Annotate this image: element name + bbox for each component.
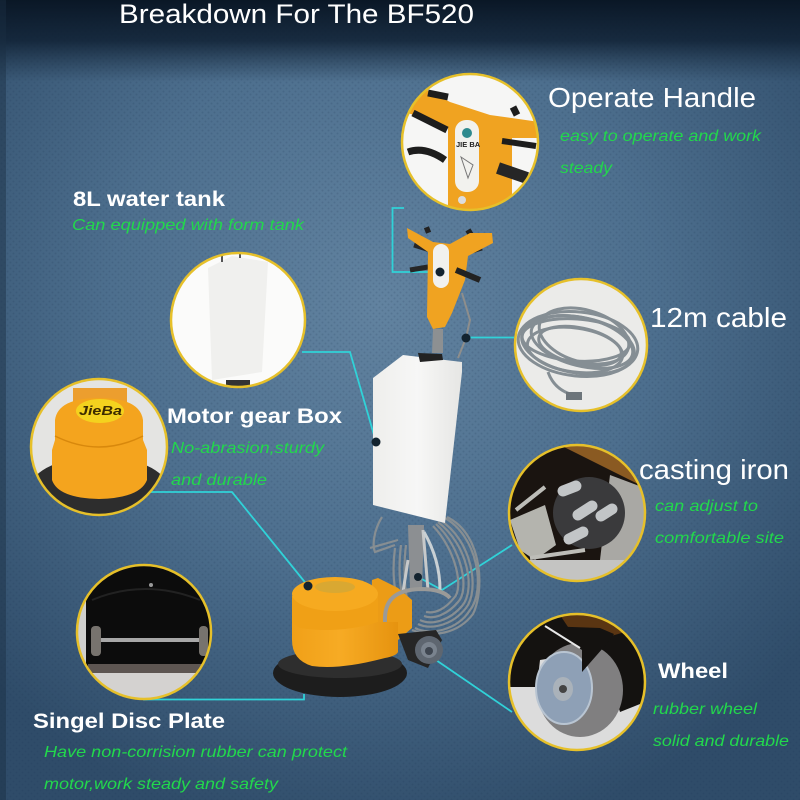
circle outline: 12m cable [515, 279, 647, 411]
circle outline: wheel [509, 614, 645, 750]
connector lines [143, 208, 514, 712]
label: motor gear box: Motor gear Box [167, 405, 342, 428]
label: disc plate: Singel Disc Plate [33, 710, 225, 733]
machine: motor housing [292, 577, 398, 667]
machine: tank cap [418, 353, 443, 362]
label: motor gear box: and durable [171, 472, 267, 489]
label: disc plate [33, 710, 348, 793]
circle outline: motor gear box [31, 379, 167, 515]
circle outline: disc plate [77, 565, 211, 699]
circle: motor gear box: JieBa [79, 403, 122, 418]
label: wheel: Wheel [658, 660, 728, 683]
label: disc plate: Have non-corrision rubber can protect [44, 744, 348, 761]
machine: side cable [458, 293, 470, 358]
machine: upper pole [432, 329, 443, 353]
machine: wheel [398, 630, 443, 668]
circle: wheel [510, 615, 644, 749]
label: disc plate: motor,work steady and safety [44, 776, 279, 793]
label: casting iron [639, 454, 789, 547]
label: 12m cable: 12m cable [650, 302, 787, 333]
circle: disc plate [78, 566, 210, 698]
label: water tank: 8L water tank [73, 188, 225, 211]
label: motor gear box [167, 405, 342, 489]
label: water tank: Can equipped with form tank [72, 217, 305, 234]
label: casting iron: comfortable site [655, 530, 784, 547]
label: casting iron: can adjust to [655, 498, 758, 515]
circle: operate handle [403, 75, 537, 209]
circle outline: casting iron [509, 445, 645, 581]
label: wheel: rubber wheel [653, 701, 758, 718]
circle: operate handle: JIE BA [456, 140, 481, 149]
machine [273, 228, 493, 697]
label: casting iron: casting iron [639, 454, 789, 485]
machine: anchor dots [304, 268, 470, 590]
machine: water tank [373, 355, 462, 523]
label: water tank [72, 188, 305, 234]
machine: hose [385, 589, 450, 622]
label: motor gear box: No-abrasion,sturdy [171, 440, 325, 457]
label: operate handle: easy to operate and work [560, 128, 762, 145]
machine: lower pole [403, 525, 440, 592]
circle outline: water tank [171, 253, 305, 387]
machine: cable coil [370, 517, 479, 634]
label: wheel: solid and durable [653, 733, 789, 750]
machine: handle [407, 228, 493, 329]
machine: disc plate [273, 649, 407, 697]
circle: motor gear box [30, 378, 170, 518]
circle: 12m cable [515, 279, 647, 411]
label: wheel [653, 660, 789, 750]
label: operate handle [548, 82, 762, 177]
circle outline: operate handle [402, 74, 538, 210]
circle: water tank [172, 254, 304, 386]
machine: rear housing [370, 578, 412, 640]
circle: casting iron [510, 446, 644, 580]
label: operate handle: Operate Handle [548, 82, 756, 113]
label: operate handle: steady [560, 160, 613, 177]
